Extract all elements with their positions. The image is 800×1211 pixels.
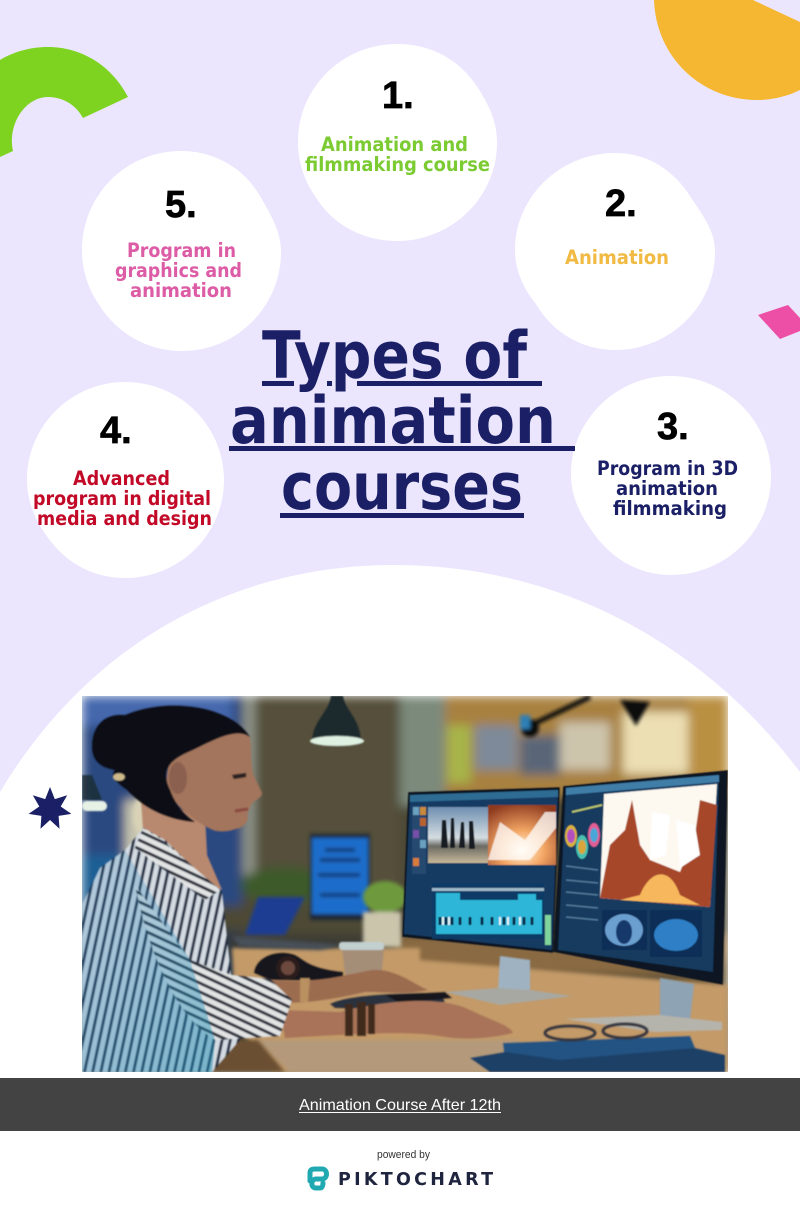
right monitor [553, 770, 728, 985]
shirt blue tint [82, 850, 215, 1072]
circle 4: advanced program in digital media and design: program in digital [33, 487, 211, 510]
circle 1: animation and filmmaking course: Animation and [321, 133, 468, 156]
circle 1: animation and filmmaking course: 1. [382, 75, 414, 117]
woman: striped shirt body [82, 828, 240, 1072]
circle 5: program in graphics and animation: graphics and [115, 259, 242, 282]
left background lamp [82, 775, 107, 811]
right monitor: blue thumbnails [602, 910, 647, 950]
circle 5: program in graphics and animation: Program in [127, 239, 236, 262]
circle 1: animation and filmmaking course: filmmaking course [305, 153, 490, 176]
notebooks and glasses [470, 1024, 725, 1072]
left monitor: orange video preview [488, 805, 556, 865]
right monitor: big orange preview [600, 784, 717, 907]
photo: woman editing video at dual monitors [82, 696, 728, 1072]
back monitor and laptop [232, 834, 370, 950]
title: animation [230, 384, 556, 459]
woman: face [165, 725, 262, 831]
monitor stands [445, 956, 722, 1032]
woman: hair [92, 705, 250, 822]
desk [232, 948, 728, 1072]
decoration: pink diamond [758, 305, 800, 339]
coffee cup [339, 942, 384, 982]
sticky and lamp arm [520, 697, 650, 737]
woman: neck [141, 800, 222, 890]
woman: ear and eye [169, 762, 248, 811]
circle 3: program in 3D animation filmmaking: animation [616, 477, 718, 500]
circle 5: program in graphics and animation: animation [130, 279, 232, 302]
piktochart logo [310, 1149, 493, 1190]
hanging lamp [310, 696, 364, 746]
circle 3: program in 3D animation filmmaking [571, 376, 771, 575]
woman: shirt collar [135, 828, 220, 900]
woman: hands and arms [265, 970, 513, 1039]
piktochart logo: PIKTOCHART [338, 1170, 493, 1190]
footer white strip [0, 1131, 800, 1211]
circle 2: animation: Animation [565, 246, 669, 269]
woman: shirt sleeve [135, 885, 292, 1040]
left monitor: thumbnails [412, 806, 426, 874]
circle 2: animation [515, 153, 715, 350]
circle 4: advanced program in digital media and design: 4. [100, 410, 132, 452]
photo background: blurred office [82, 696, 728, 1072]
woman: blond hair tuft [113, 773, 125, 781]
headphones [254, 953, 343, 981]
decoration: yellow pie [654, 0, 800, 100]
piktochart logo: powered by [377, 1149, 430, 1161]
woman: pale light behind nape [132, 796, 143, 832]
title: Types of [262, 319, 528, 394]
circle 2: animation: 2. [605, 183, 637, 225]
white dome [0, 565, 800, 1080]
circle 4: advanced program in digital media and design: Advanced [73, 467, 170, 490]
circle 5: program in graphics and animation [82, 151, 281, 351]
right monitor: colour wheels [565, 825, 577, 847]
circle 1: animation and filmmaking course [298, 44, 497, 241]
icon: navy star [29, 787, 71, 829]
circle 3: program in 3D animation filmmaking: 3. [657, 406, 689, 448]
circle 5: program in graphics and animation: 5. [165, 184, 197, 226]
left monitor: video preview with silhouettes [428, 807, 488, 863]
circle 4: advanced program in digital media and design [27, 382, 224, 578]
circle 3: program in 3D animation filmmaking: Program in 3D [597, 457, 738, 480]
keyboard and mousepad [330, 992, 452, 1010]
plant and pot [363, 881, 407, 947]
footer bar [0, 1078, 800, 1131]
left monitor [402, 787, 560, 953]
circle 4: advanced program in digital media and design: media and design [37, 507, 212, 530]
title: courses [281, 450, 523, 525]
decoration: green arc [0, 47, 128, 157]
left monitor: timeline [432, 883, 544, 939]
footer bar: Animation Course After 12th [299, 1097, 501, 1114]
circle 3: program in 3D animation filmmaking: filmmaking [613, 497, 727, 520]
title [229, 319, 575, 525]
